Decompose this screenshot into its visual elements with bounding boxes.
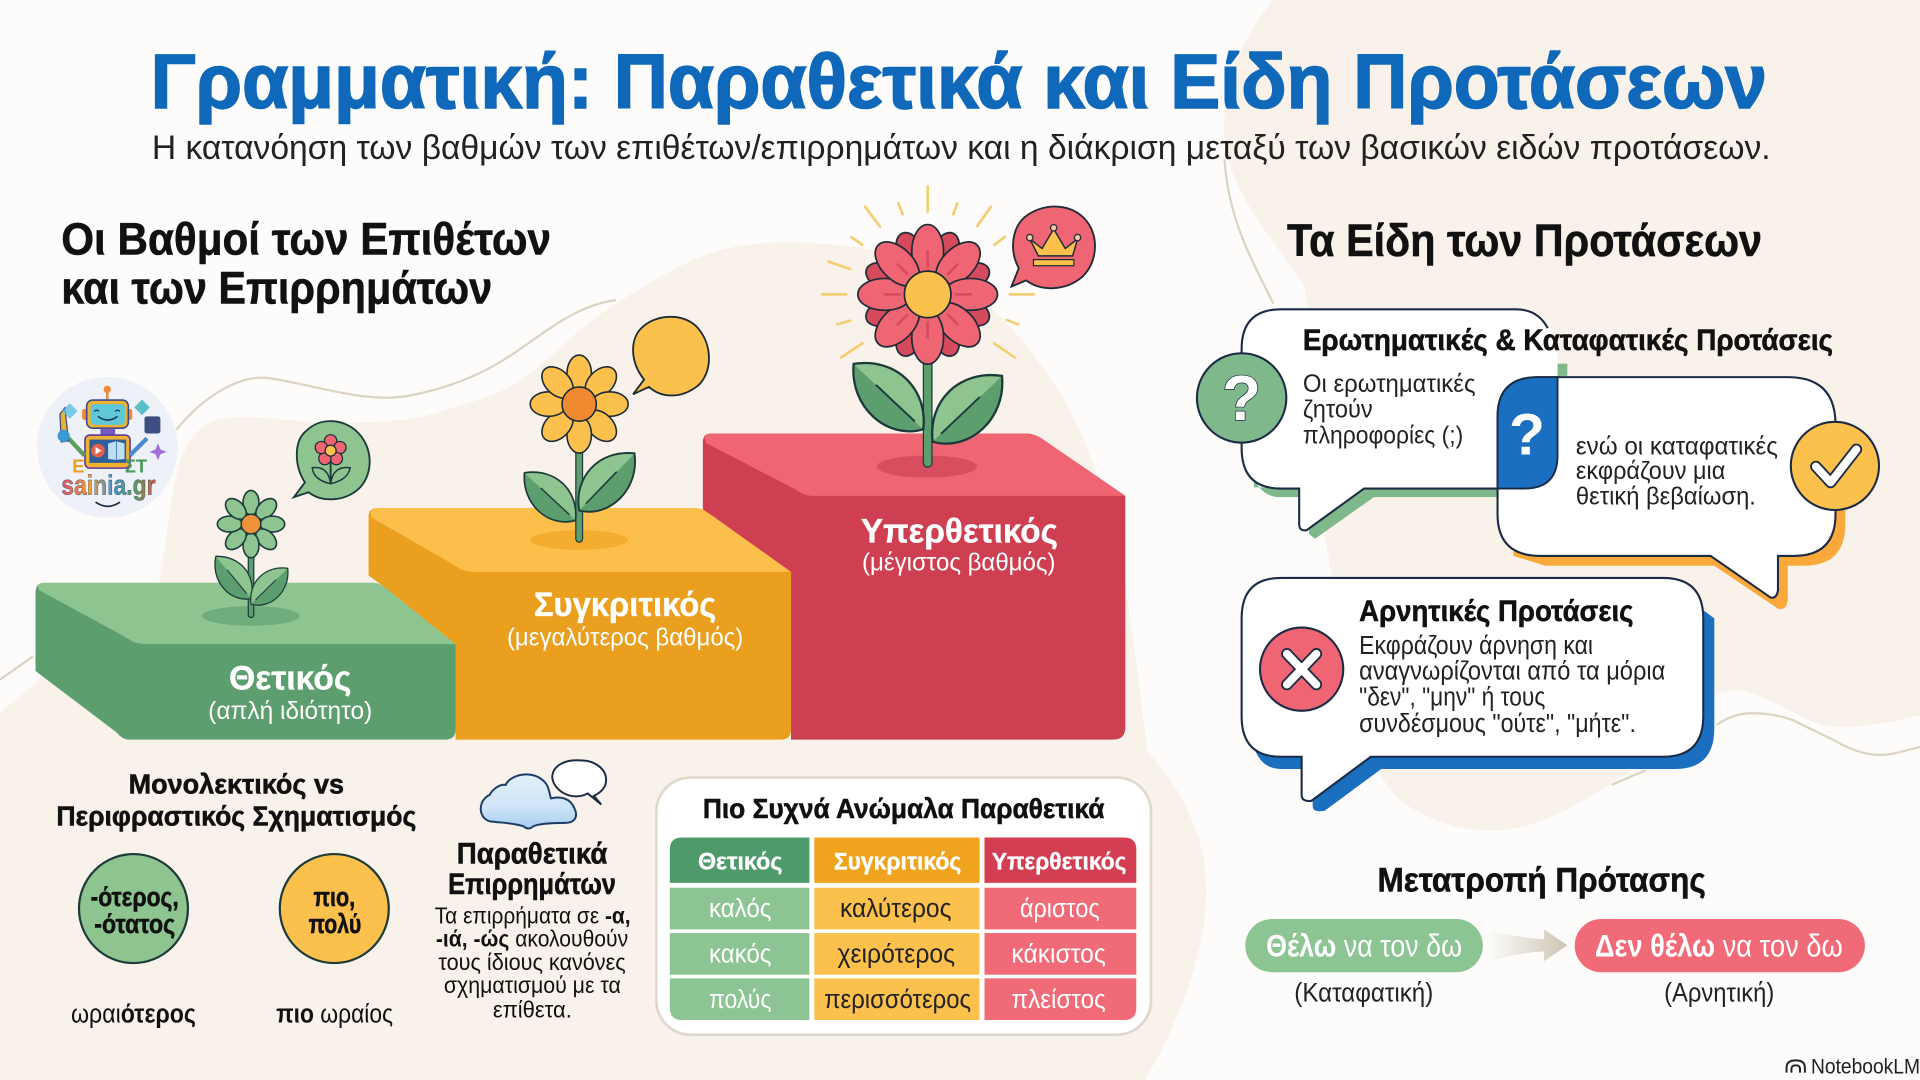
bubble text: Εκφράζουν άρνηση και bbox=[1359, 630, 1593, 660]
heading: degrees of adjectives and adverbs bbox=[61, 214, 551, 314]
heading: degrees of adjectives and adverbs: Οι Βαθμοί των Επιθέτων bbox=[61, 214, 551, 265]
heading: sentence types: Τα Είδη των Προτάσεων bbox=[1287, 215, 1762, 266]
pill: affirmative example: Θέλω να τον δω bbox=[1266, 927, 1462, 963]
bubble text: "δεν", "μην" ή τους bbox=[1359, 681, 1545, 711]
table column: positive: κακός bbox=[709, 938, 771, 968]
icon: sainia.gr robot logo: ΣΤ bbox=[125, 456, 148, 477]
icon: sainia.gr robot logo: Ε bbox=[72, 456, 84, 477]
speech bubble: negative sentences bbox=[1242, 578, 1714, 811]
speech bubble: interrogative sentences bbox=[1197, 309, 1567, 539]
label: positive: Θετικός bbox=[229, 659, 351, 697]
panel: irregular comparatives table bbox=[656, 778, 1151, 1035]
heading: formation: Μονολεκτικός vs bbox=[129, 768, 344, 799]
speech bubble: mini flower bbox=[294, 421, 370, 499]
table column: positive: πολύς bbox=[709, 984, 771, 1014]
bubble text: εκφράζουν μια bbox=[1576, 457, 1725, 485]
pill: negative example: Δεν θέλω να τον δω bbox=[1595, 927, 1843, 963]
bubble text: Οι ερωτηματικές bbox=[1303, 370, 1476, 398]
bubble text bbox=[1359, 630, 1665, 738]
table column: positive bbox=[670, 838, 809, 1020]
bubble text: ενώ οι καταφατικές bbox=[1576, 432, 1778, 460]
speech bubble: empty yellow bbox=[633, 317, 709, 396]
speech bubble: affirmative sentences bbox=[1498, 377, 1879, 609]
icon: sainia.gr robot logo: sainia.gr bbox=[61, 470, 156, 501]
pill: affirmative example bbox=[1245, 919, 1483, 972]
table column: comparative: καλύτερος bbox=[840, 893, 951, 923]
panel: one-word vs periphrastic formation bbox=[56, 768, 416, 1028]
icon: blue question mark bbox=[1498, 377, 1558, 489]
table column: superlative: άριστος bbox=[1020, 893, 1100, 923]
bubble text bbox=[1576, 432, 1778, 510]
step: comparative degree (orange) bbox=[369, 508, 791, 740]
table column: positive: Θετικός bbox=[698, 848, 782, 875]
circle: one-word suffixes bbox=[79, 854, 188, 963]
bubble text: αναγνωρίζονται από τα μόρια bbox=[1359, 656, 1665, 686]
heading: formation bbox=[56, 768, 416, 831]
label: superlative bbox=[861, 512, 1058, 577]
example: periphrastic: πιο ωραίος bbox=[276, 1000, 393, 1028]
label: negative: (Αρνητική) bbox=[1664, 978, 1774, 1008]
label: comparative: Συγκριτικός bbox=[534, 586, 716, 624]
heading: formation: Περιφραστικός Σχηματισμός bbox=[56, 800, 416, 831]
text block: adverb comparatives: Παραθετικά bbox=[457, 837, 607, 870]
table column: comparative bbox=[814, 838, 980, 1020]
table column: superlative: κάκιστος bbox=[1011, 938, 1106, 968]
circle: periphrastic words: πολύ bbox=[309, 909, 361, 939]
table column: positive: καλός bbox=[709, 893, 771, 923]
icon: sainia.gr robot logo bbox=[37, 377, 178, 518]
label: positive bbox=[208, 659, 372, 725]
title: Γραμματική: Παραθετικά και Είδη Προτάσεων bbox=[151, 39, 1767, 125]
circle: one-word suffixes: -ότατος bbox=[94, 909, 175, 939]
table column: superlative bbox=[984, 838, 1136, 1020]
label: comparative bbox=[507, 586, 743, 651]
circle: one-word suffixes: -ότερος, bbox=[91, 882, 179, 912]
panel: sentence conversion bbox=[1245, 861, 1865, 1008]
bubble text: θετική βεβαίωση. bbox=[1576, 482, 1756, 510]
text block: adverb comparatives: σχηματισμού με τα bbox=[444, 972, 621, 998]
icon: medium yellow flower bbox=[512, 355, 650, 550]
icon: yellow check bbox=[1791, 422, 1879, 510]
icon: blue question mark: ? bbox=[1509, 402, 1545, 467]
bubble text: ζητούν bbox=[1303, 396, 1373, 424]
bubble text bbox=[1303, 370, 1476, 449]
icon: small green flower bbox=[202, 490, 300, 626]
speech bubble: crown bbox=[1011, 207, 1095, 288]
heading: degrees of adjectives and adverbs: και των Επιρρημάτων bbox=[61, 263, 492, 314]
label: affirmative: (Καταφατική) bbox=[1294, 978, 1433, 1008]
table column: comparative: περισσότερος bbox=[824, 984, 971, 1014]
bubble heading: Αρνητικές Προτάσεις bbox=[1359, 595, 1633, 628]
table column: superlative: Υπερθετικός bbox=[992, 848, 1127, 875]
icon: large red flower with rays bbox=[822, 187, 1034, 478]
icon: red X bbox=[1260, 628, 1343, 711]
arrow bbox=[1487, 929, 1567, 962]
text block: adverb comparatives: επίθετα. bbox=[493, 997, 572, 1023]
bubble text: συνδέσμους "ούτε", "μήτε". bbox=[1359, 708, 1636, 738]
text block: adverb comparatives: Επιρρημάτων bbox=[448, 868, 616, 901]
heading: interrogative and affirmative: Ερωτηματικές & Καταφατικές Προτάσεις bbox=[1303, 324, 1833, 357]
circle: periphrastic words bbox=[280, 854, 389, 963]
label: comparative: (μεγαλύτερος βαθμός) bbox=[507, 623, 743, 651]
table column: superlative: πλείστος bbox=[1011, 984, 1106, 1014]
icon: green question mark bbox=[1197, 353, 1286, 443]
step: superlative degree (red) bbox=[703, 433, 1125, 740]
text block: adverb comparatives: -ιά, -ώς ακολουθούν bbox=[436, 926, 628, 952]
subtitle: Η κατανόηση των βαθμών των επιθέτων/επιρρημάτων και η διάκριση μεταξύ των βασικών ειδών προτάσεων. bbox=[152, 129, 1771, 167]
label: superlative: Υπερθετικός bbox=[861, 512, 1058, 550]
table column: comparative: Συγκριτικός bbox=[834, 848, 961, 875]
circle: periphrastic words: πιο, bbox=[313, 882, 355, 912]
label: superlative: (μέγιστος βαθμός) bbox=[862, 549, 1056, 577]
text block: adverb comparatives: τους ίδιους κανόνες bbox=[438, 949, 626, 975]
text block: adverb comparatives: Τα επιρρήματα σε -α, bbox=[435, 902, 631, 928]
heading: conversion: Μετατροπή Πρότασης bbox=[1378, 861, 1706, 899]
icon: cloud with speech bubble bbox=[481, 760, 606, 829]
step: positive degree (green) bbox=[36, 583, 456, 740]
table column: comparative: χειρότερος bbox=[838, 938, 955, 968]
text block: adverb comparatives bbox=[435, 837, 631, 1023]
table title: Πιο Συχνά Ανώμαλα Παραθετικά bbox=[703, 793, 1105, 824]
icon: green question mark: ? bbox=[1222, 363, 1261, 434]
label: positive: (απλή ιδιότητο) bbox=[208, 697, 372, 725]
bubble text: πληροφορίες (;) bbox=[1303, 421, 1463, 449]
example: one-word: ωραιότερος bbox=[71, 1000, 196, 1028]
pill: negative example bbox=[1575, 919, 1865, 972]
